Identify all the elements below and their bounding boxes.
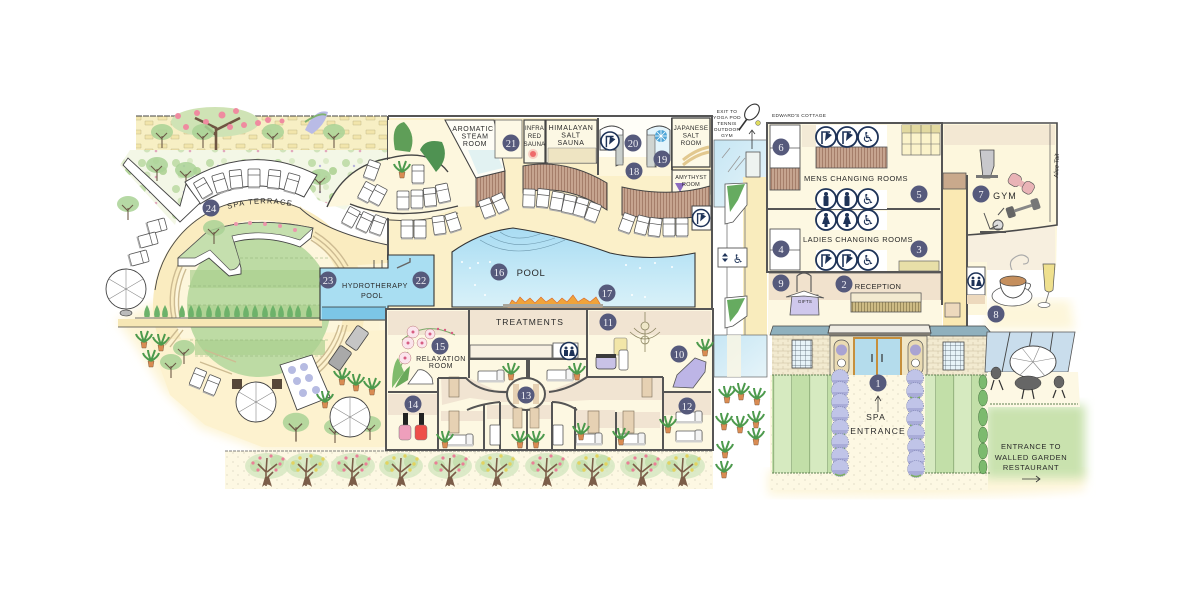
icon: treatment plants [437,339,713,448]
panel: hydrotherapy pool: HYDROTHERAPY [342,281,408,290]
icon: ice cylinder [647,126,670,167]
icon: number badges: 11 [603,318,613,329]
icon: number badges: 14 [408,400,419,411]
text: aromatic steam room: STEAM [461,134,489,140]
text: walled garden directions: ENTRANCE TO [1001,442,1061,451]
panel: left entrance lawn [772,375,832,473]
panel: right entrance lawn [925,375,990,473]
icon: spa jars [596,338,628,370]
icon: shower cylinder [600,126,623,166]
heading: pool: POOL [517,268,545,279]
icon: number badges: 10 [674,350,684,361]
panel: amethyst room [672,170,710,194]
icon: wisteria [305,111,328,134]
panel: lockers [902,125,940,155]
panel: himalayan salt sauna: SALT [561,132,581,140]
icon: number badges: 19 [657,155,667,166]
panel: treatments building [386,309,713,450]
panel: canopy shadow [829,333,930,336]
panel: infra red sauna [524,120,545,163]
panel: treatment doors [449,377,652,433]
heading: mens changing rooms: MENS CHANGING ROOMS [804,174,908,183]
icon: number badges: 13 [521,391,531,402]
icon: number badges: 5 [916,190,922,201]
icon: number badges: 18 [629,167,639,178]
panel: mens showers [816,125,887,168]
icon: exercise bike [980,208,1006,232]
panel: reception [768,273,942,335]
text: exit label: YOGA POD [713,115,741,121]
panel: glass corridor strip [713,101,826,478]
text: artist signature: Alice Tait [1054,153,1061,179]
icon: side loungers [127,218,221,397]
text: walled garden directions: RESTAURANT [1003,463,1059,472]
panel: amethyst room: AMYTHYST [675,175,707,181]
icon: nail polish [399,413,427,440]
icon: number badges: 3 [916,245,922,256]
panel: canopy [828,325,931,333]
icon: number badges: 16 [494,268,504,279]
panel: room 12 back wall [664,393,711,415]
icon: central oval lobby [507,378,545,428]
icon: number badges: 22 [416,276,426,287]
heading: ladies changing rooms: LADIES CHANGING ROOMS [803,235,913,244]
panel: amethyst room: ROOM [682,182,700,188]
chart: lawn circle [187,233,332,377]
panel: room 21 [495,120,522,158]
icon: lilac treatment couch [673,358,706,388]
icon: lavender bed [280,355,333,410]
icon: number badges: 15 [435,342,445,353]
icon: number badges: 20 [628,139,638,150]
panel: himalayan salt sauna [546,120,597,163]
icon: potted plant group [716,383,765,478]
icon: champagne glass [1038,264,1055,308]
panel: walled garden top [117,107,388,225]
panel: aromatic steam room [445,120,505,207]
text: exit label: TENNIS [717,121,737,127]
background washes [116,240,1085,497]
icon: number badges: 23 [323,276,333,287]
panel: japanese salt room: JAPANESE [674,125,708,132]
panel: ladies showers [816,250,887,271]
panel: pool [452,228,695,307]
icon: number badges: 8 [993,310,999,321]
panel: treatments banner [470,310,587,335]
panel: right brown wall [622,186,710,218]
text: walled garden directions [995,442,1067,482]
panel: hydrotherapy pool [320,255,434,320]
icon: number badges: 21 [506,139,516,150]
panel: shower experience rooms [598,118,672,176]
panel: japanese salt room: SALT [683,132,699,140]
panel: pool terrace floor [388,116,712,310]
panel: spa terrace ring [153,199,400,411]
icon: number badges: 7 [978,190,984,201]
icon: number badges: 24 [206,204,217,215]
panel: entrance doors [830,336,927,377]
panel: relaxation back wall [388,311,469,335]
icon: barbell weight [1005,198,1041,219]
icon: number badges: 9 [778,279,784,290]
panel: changing rooms floor [767,123,942,273]
icon: pool loungers [478,188,688,238]
text: spa entrance: ENTRANCE [850,426,906,436]
icon: number badges: 2 [841,280,847,291]
panel: treatments banner: TREATMENTS [496,317,564,327]
panel: japanese salt room: ROOM [681,140,701,147]
panel: slate roofs [770,326,994,336]
icon: lavender rows [832,370,924,478]
icon: pink dumbbell [1007,172,1036,196]
icon: parasols [106,269,370,437]
text: spa entrance [850,396,906,436]
icon: gift bag: GIFTS [798,299,812,304]
panel: loungers planter [123,158,317,222]
panel: room 10 11 back wall [589,311,711,335]
panel: lawn steps [165,232,348,378]
panel: himalayan salt sauna: HIMALAYAN [549,125,593,132]
panel: reception: RECEPTION [855,282,901,291]
text: aromatic steam room: ROOM [463,141,487,148]
panel: infra red sauna: INFRA [525,126,544,132]
text: relaxation room: ROOM [429,363,453,370]
text: exit label: EXIT TO [717,109,737,115]
icon: number badges: 1 [875,379,881,390]
text: relaxation room: RELAXATION [416,356,466,363]
icon: patio table and chairs [991,367,1065,399]
panel: room 14 back wall [388,394,438,415]
icon: cafe restroom sign [967,267,985,304]
panel: treatments store [470,345,552,358]
icon: grey loungers [328,325,369,371]
panel: mens toilets [816,189,887,209]
panel: orchard strip [225,451,713,489]
icon: gift bag [786,273,824,315]
panel: conservatory glass [985,332,1075,372]
panel: courtyard [327,120,476,239]
icon: coffee cup [992,255,1032,306]
icon: courtyard tropical plants [394,122,445,178]
icon: chandelier [630,312,660,352]
heading: gym: GYM [993,191,1017,201]
icon: terrace plants [136,331,380,395]
panel: brown sauna wall [523,164,607,210]
panel: entrance gravel path [770,375,988,490]
text: spa entrance: SPA [866,412,886,422]
text: spa terrace: SPA TERRACE [228,198,292,208]
panel: path and cypress row [118,305,322,327]
icon: lift and accessible sign: ♿ [733,252,743,266]
panel: curved treatment corridor [441,377,663,405]
icon: flowering tree [171,107,284,150]
icon: shower sign [692,206,711,230]
icon: number badges: 6 [778,143,784,154]
panel: ladies lockers [899,261,939,271]
panel: lower treatment back walls [441,405,660,428]
text: walled garden directions: WALLED GARDEN [995,453,1067,462]
icon: windows [792,340,964,370]
icon: number badges: 17 [602,289,612,300]
icon: fire feature [503,295,603,307]
icon: urn niches [834,340,923,375]
panel: treatment walls [386,309,713,450]
text: exit label: OUTDOOR [714,127,741,133]
panel: infra red sauna: RED [528,134,542,140]
text: exit label: GYM [721,133,733,139]
panel: himalayan salt sauna: SAUNA [557,140,585,147]
panel: central raised flower bed [178,220,313,276]
icon: number badges: 12 [682,402,692,413]
panel: japanese salt room [672,118,710,167]
icon: restroom sign [553,342,578,360]
panel: ladies toilets [816,210,887,230]
icon: topiary hedge [978,375,988,474]
icon: gym machine [976,150,998,178]
icon: relaxation chaise [408,370,433,384]
text: aromatic steam room: AROMATIC [452,126,494,133]
icon: patio parasol [1010,346,1056,378]
icon: number badges: 4 [778,245,784,256]
icon: treatment beds [447,369,702,446]
icon: climbing plants [725,183,747,328]
panel: gym and cafe [942,123,1061,330]
panel: infra red sauna: SAUNA [524,142,545,148]
icon: orchid [392,326,455,388]
panel: hydrotherapy pool: POOL [361,291,383,300]
icon: lift and accessible sign [718,248,747,267]
panel: lower garden terrace [136,330,388,447]
icon: exit arrow [749,130,755,149]
panel: walled garden patio [988,346,1080,407]
icon: tennis racket [739,101,762,130]
icon: number badges [202,134,1004,414]
text: cottage label: EDWARD'S COTTAGE [772,113,826,119]
panel: entrance building [770,325,994,377]
icon: orchard trees [283,413,381,443]
